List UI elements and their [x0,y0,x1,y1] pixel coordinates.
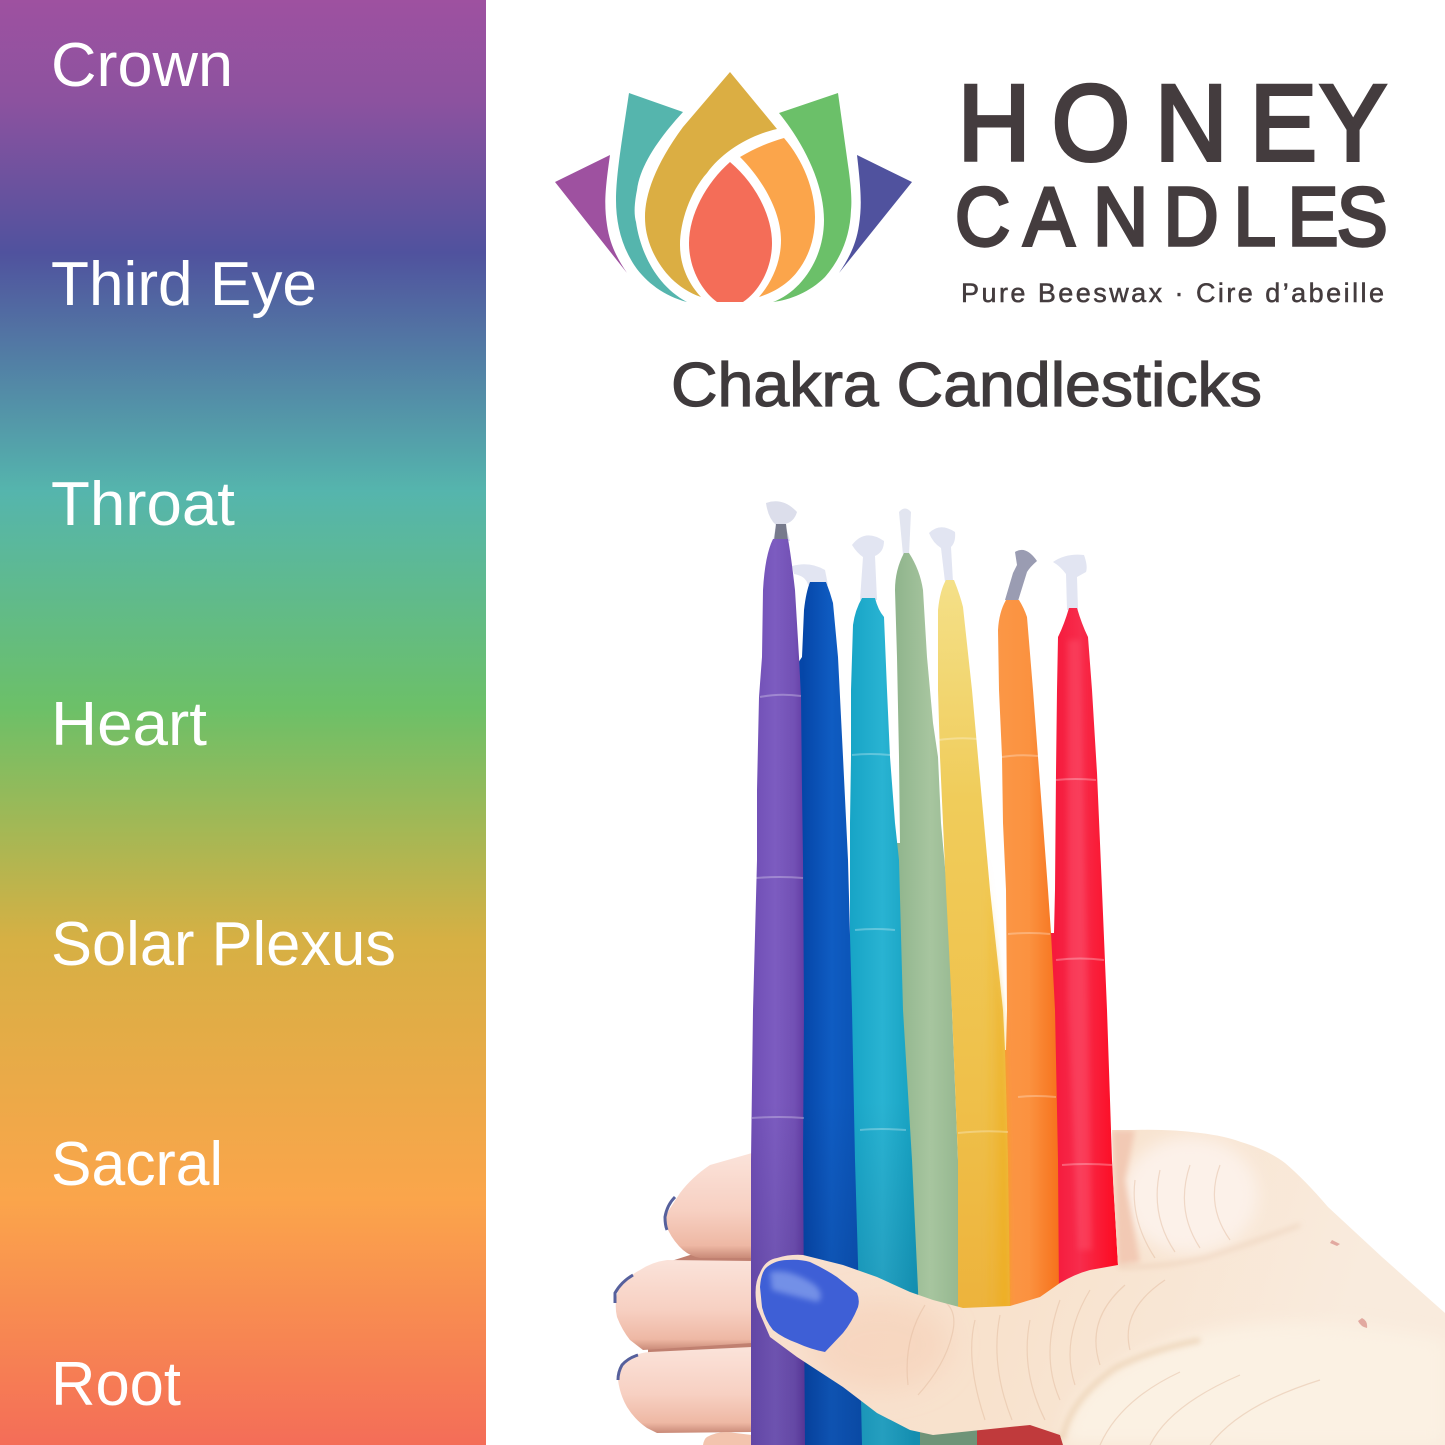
candle: cyan [850,535,922,1445]
petal: coral [689,162,772,302]
skin creases [907,1165,1320,1445]
shadowed candles below thumb [977,1425,1064,1445]
finger: little [703,1432,752,1445]
wordmark: CANDLES: CANDLES [955,170,1388,263]
candle: purple [751,501,805,1445]
petal: purple [555,155,627,273]
red highlight [1068,640,1092,1250]
palm shading [810,1130,1445,1445]
nail highlight [770,1271,821,1302]
tagline: Pure Beeswax · Cire d’abeille [961,278,1384,308]
red body [1050,608,1118,1445]
cyan wick [852,535,884,600]
candle: blue [792,564,862,1445]
petal: green [773,93,851,302]
fingernail edges [615,1197,675,1380]
finger: ring [618,1347,752,1433]
petal: indigo [839,155,912,273]
label: Root: Root [51,1350,181,1419]
blue body [798,582,862,1445]
back fingers [615,1153,752,1445]
petal: teal [616,93,687,302]
cyan body [850,598,922,1445]
gradient background [0,0,486,1445]
candle: orange [998,550,1060,1445]
candle: sage [895,508,970,1445]
wordmark: HONEY: HONEY [958,64,1387,184]
label: Solar Plexus: Solar Plexus [51,910,396,979]
cool candle lower shading [751,1100,922,1445]
sage body [895,553,970,1445]
pale base of hand [1059,1330,1294,1445]
finger gap shadow [648,1255,752,1356]
yellow wick [929,527,955,582]
palm and thumb [756,1130,1445,1445]
pale web of thumb [1122,1137,1258,1253]
sage shadow below thumb [920,1425,977,1445]
yellow right shading [965,700,1009,1310]
orange body [998,600,1060,1445]
finger: pointer [666,1153,752,1258]
candles group [751,501,1118,1445]
crease shadow under palm [1118,1225,1300,1267]
label: Sacral: Sacral [51,1130,223,1199]
candle: yellow [929,527,1012,1445]
skin blemishes [1330,1240,1367,1328]
petal: orange [740,138,815,297]
orange wick [1005,550,1037,601]
label: Heart: Heart [51,690,207,759]
logo: wordmark [955,64,1388,308]
finger: middle [616,1260,752,1350]
candle: red [1050,555,1118,1445]
title: Chakra Candlesticks [671,351,1262,420]
label: Throat: Throat [51,470,235,539]
hand-held candles photo [615,501,1445,1445]
purple body [751,539,805,1445]
label: Third Eye: Third Eye [51,250,317,319]
blue wick [792,564,828,585]
chakra labels [51,31,396,1419]
rainbow side panel [0,0,486,1445]
nail base [760,1260,859,1352]
red wick [1053,555,1087,610]
bottom crease shadow [1057,1336,1202,1441]
palm shape [756,1130,1445,1445]
thumb tip rosy shading [812,1305,942,1392]
thumbnail [760,1260,859,1352]
purple wick [766,501,797,541]
sage wick [899,508,911,555]
logo: lotus [555,72,912,302]
label: Crown: Crown [51,31,233,100]
candle dip rings [752,695,1112,1165]
pink finger edge shading [1112,1130,1140,1265]
yellow body [938,580,1012,1445]
petal: gold [645,72,777,297]
